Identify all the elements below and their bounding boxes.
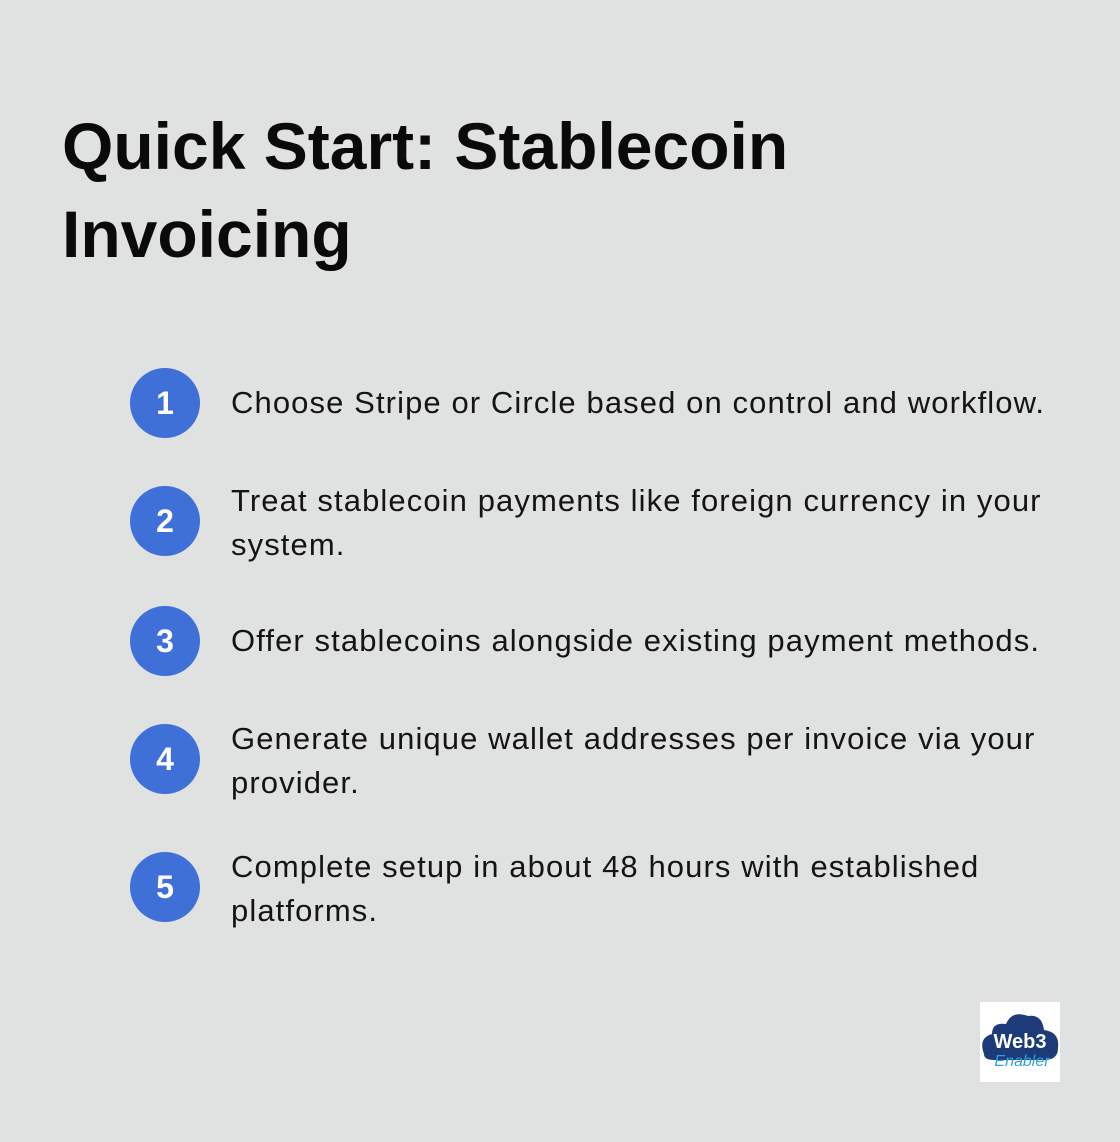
logo: Enabler <box>994 1053 1050 1070</box>
step 5: Complete setup in about 48 hours with established <box>231 849 979 884</box>
step 4: Generate unique wallet addresses per invoice via your <box>231 721 1035 756</box>
step 5: 5 <box>156 869 174 905</box>
step 2 <box>130 483 1042 562</box>
step 4: provider. <box>231 765 360 800</box>
step 3 <box>130 606 1040 676</box>
step 4: 4 <box>156 741 174 777</box>
logo <box>980 1002 1060 1082</box>
title <box>62 109 788 271</box>
title: Quick Start: Stablecoin <box>62 109 788 183</box>
step 5: platforms. <box>231 893 378 928</box>
step 3: Offer stablecoins alongside existing payment methods. <box>231 623 1040 658</box>
step 1: Choose Stripe or Circle based on control and workflow. <box>231 385 1045 420</box>
logo: Web3 <box>994 1031 1046 1053</box>
step 2: system. <box>231 527 346 562</box>
title: Invoicing <box>62 197 352 271</box>
step 3: 3 <box>156 623 174 659</box>
step 1: 1 <box>156 385 174 421</box>
step 4 <box>130 721 1035 800</box>
step 2: 2 <box>156 503 174 539</box>
step 1 <box>130 368 1045 438</box>
step 5 <box>130 849 979 928</box>
step 2: Treat stablecoin payments like foreign currency in your <box>231 483 1042 518</box>
